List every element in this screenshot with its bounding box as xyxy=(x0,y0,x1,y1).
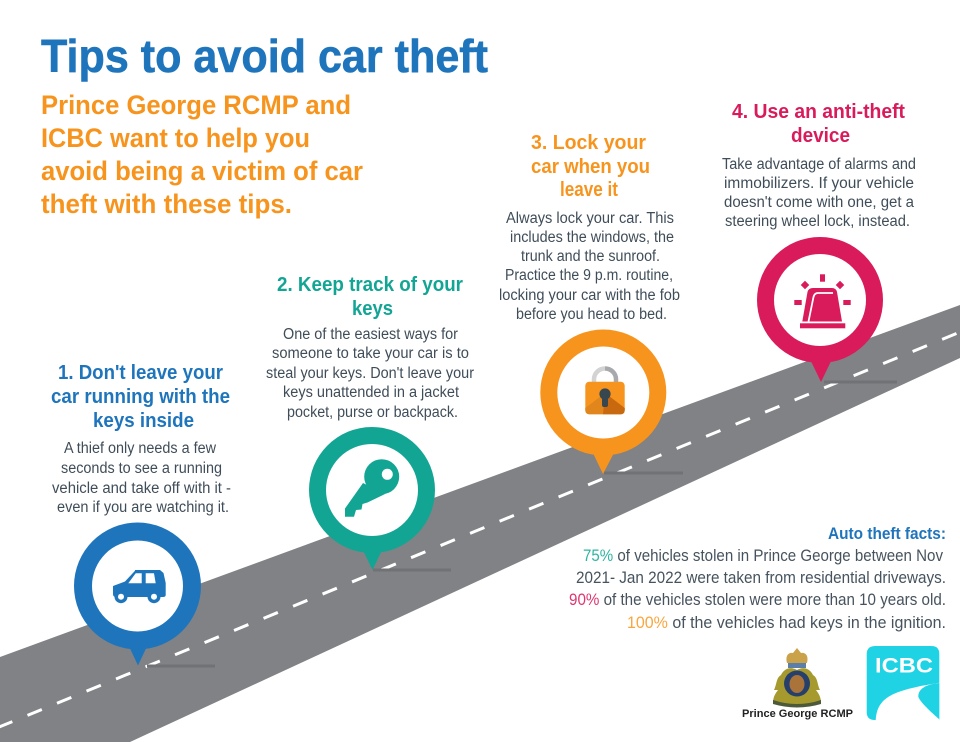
subtitle xyxy=(41,90,363,219)
tip 2 text: pocket, purse or backpack. xyxy=(287,404,458,421)
tip 3 heading: 3. Lock your xyxy=(531,132,646,154)
tip 3 heading xyxy=(531,132,650,201)
tip 3 text: Practice the 9 p.m. routine, xyxy=(505,267,673,284)
tip 2 text: steal your keys. Don't leave your xyxy=(266,365,474,382)
icon: car xyxy=(113,570,166,603)
tip 3 text: includes the windows, the xyxy=(510,229,674,246)
tip 4 text: immobilizers. If your vehicle xyxy=(724,175,914,192)
tip 2 heading: keys xyxy=(352,298,393,320)
tip 2 text: keys unattended in a jacket xyxy=(283,384,460,401)
tip 1 heading xyxy=(51,362,230,432)
tip 4 text xyxy=(722,156,916,230)
tip 2 heading: 2. Keep track of your xyxy=(277,274,463,296)
tip 2 text xyxy=(266,326,474,421)
tip 1 text: vehicle and take off with it - xyxy=(52,480,231,497)
tip 1 heading: keys inside xyxy=(93,410,194,432)
tip 4 heading xyxy=(732,101,905,147)
tip 4 heading: 4. Use an anti-theft xyxy=(732,101,905,123)
tip 1 text: even if you are watching it. xyxy=(57,499,229,516)
tip 4 text: steering wheel lock, instead. xyxy=(725,213,910,230)
auto theft facts: Auto theft facts: xyxy=(828,525,946,543)
tip 3 heading: leave it xyxy=(560,179,618,201)
tip 3 text: trunk and the sunroof. xyxy=(521,248,660,265)
tip 1 text: seconds to see a running xyxy=(61,460,222,477)
subtitle: avoid being a victim of car xyxy=(41,156,363,186)
tip 4 text: Take advantage of alarms and xyxy=(722,156,916,173)
tip 3 text: before you head to bed. xyxy=(516,306,667,323)
logo: ICBC xyxy=(867,646,939,720)
subtitle: ICBC want to help you xyxy=(41,123,310,153)
road xyxy=(0,305,960,742)
logo: RCMP crest: Prince George RCMP xyxy=(742,708,853,720)
tip 3 text xyxy=(499,210,680,323)
tip 3 text: locking your car with the fob xyxy=(499,287,680,304)
tip 4 heading: device xyxy=(791,125,850,147)
logo: RCMP crest xyxy=(742,648,853,720)
subtitle: Prince George RCMP and xyxy=(41,90,351,120)
tip 2 text: One of the easiest ways for xyxy=(283,326,458,343)
icon: key xyxy=(345,459,399,517)
logo: ICBC: ICBC xyxy=(875,654,933,678)
pin 1: car xyxy=(74,522,215,668)
tip 3 text: Always lock your car. This xyxy=(506,210,674,227)
tip 1 heading: car running with the xyxy=(51,386,230,408)
pin 4: siren xyxy=(757,237,897,384)
pin 3: lock xyxy=(540,330,683,474)
tip 1 text: A thief only needs a few xyxy=(64,440,217,457)
tip 2 text: someone to take your car is to xyxy=(272,345,469,362)
auto theft facts: 100% of the vehicles had keys in the ignition. xyxy=(627,614,946,632)
tip 1 heading: 1. Don't leave your xyxy=(58,362,223,384)
tip 4 text: doesn't come with one, get a xyxy=(724,194,914,211)
subtitle: theft with these tips. xyxy=(41,189,292,219)
tip 3 heading: car when you xyxy=(531,156,650,178)
auto theft facts xyxy=(569,525,946,632)
tip 1 text xyxy=(52,440,231,516)
tip 2 heading xyxy=(277,274,463,320)
icon: padlock xyxy=(585,368,625,414)
icon: siren xyxy=(794,274,851,328)
title: Tips to avoid car theft xyxy=(41,30,488,82)
pin 2: key xyxy=(309,427,451,572)
